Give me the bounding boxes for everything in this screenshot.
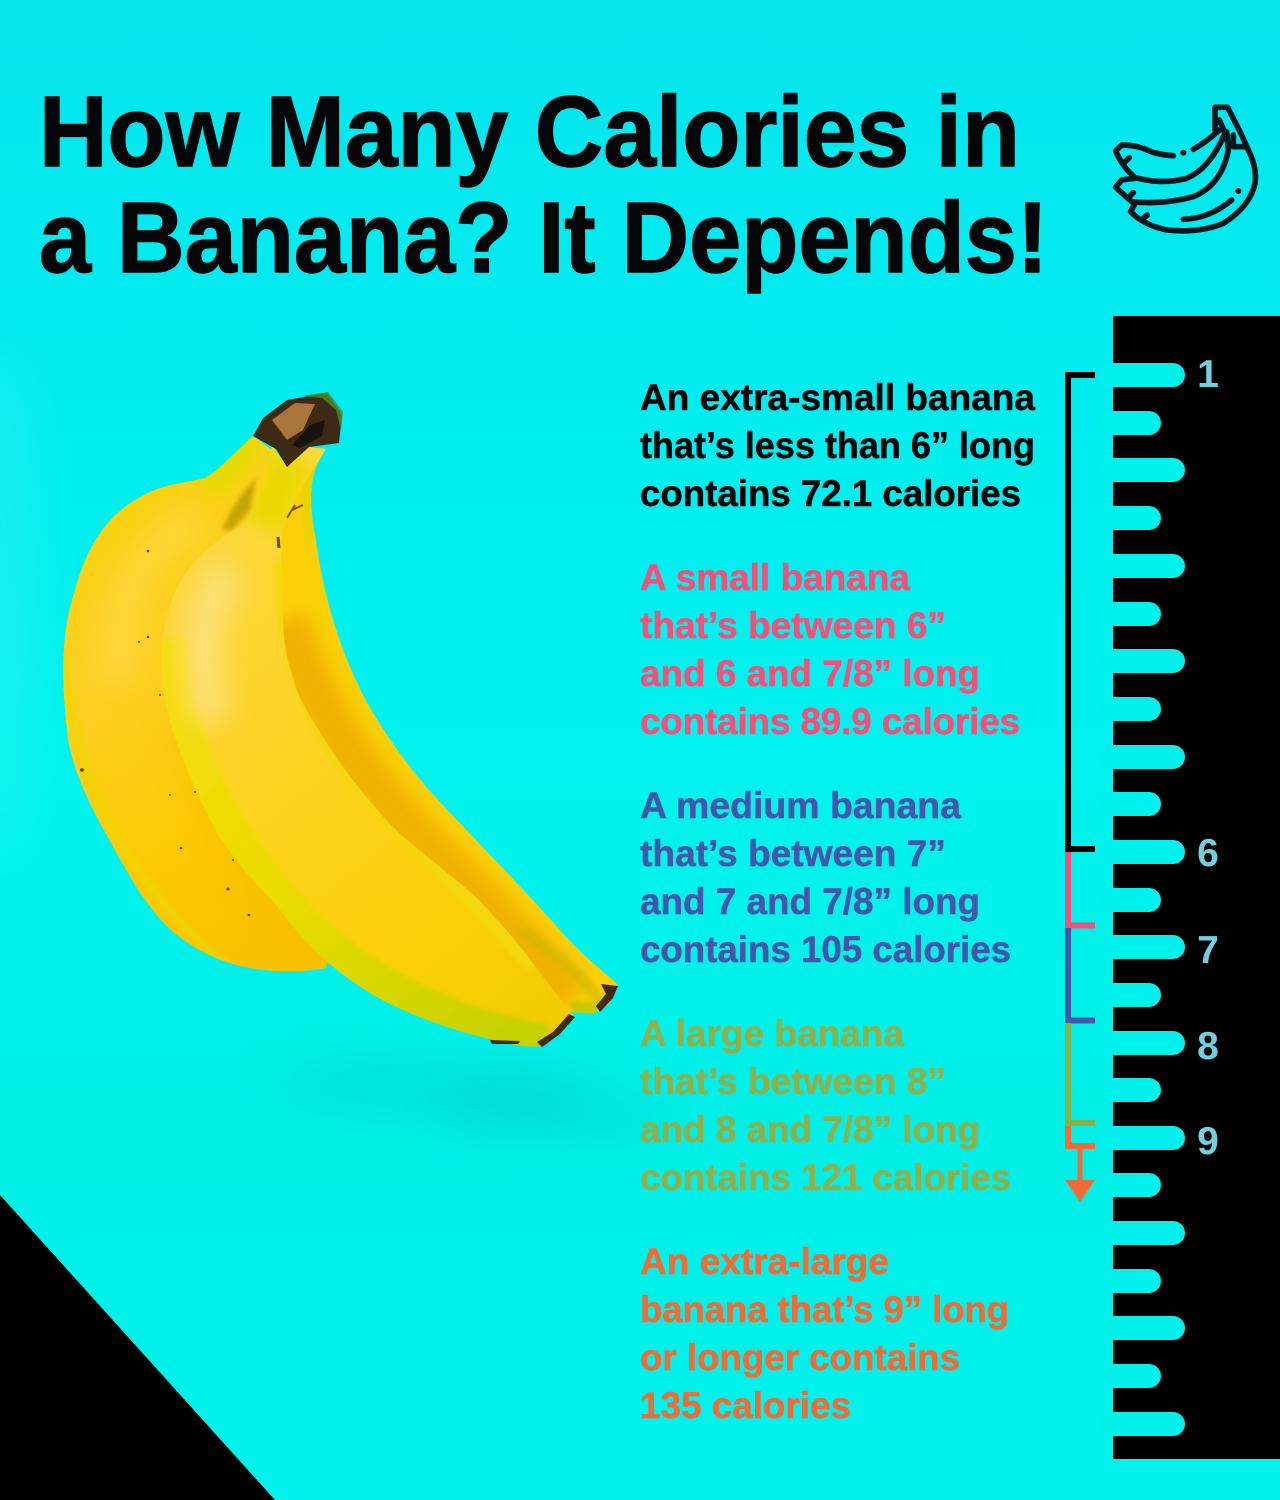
text: extra-large banana: banana that’s 9” long <box>640 1289 1009 1330</box>
text: extra-small banana: contains 72.1 calories <box>640 473 1021 514</box>
text: extra-small banana: that’s less than 6” long <box>640 425 1035 466</box>
text: small banana: contains 89.9 calories <box>640 701 1020 742</box>
text: extra-large banana: or longer contains <box>640 1337 960 1378</box>
bracket: extra-large arrow <box>1065 1126 1095 1202</box>
front banana <box>161 445 575 1047</box>
text: small banana: A small banana <box>640 557 910 598</box>
text: medium banana: and 7 and 7/8” long <box>640 881 980 922</box>
text: extra-large banana: An extra-large <box>640 1241 889 1282</box>
ruler numbers: 8 <box>1197 1025 1219 1068</box>
text: medium banana <box>640 785 1011 970</box>
ruler <box>1100 316 1280 1459</box>
banana stem cap <box>253 392 343 467</box>
ruler numbers <box>1197 353 1219 1163</box>
text: extra-small banana: An extra-small banana <box>640 377 1035 418</box>
ruler numbers: 1 <box>1197 353 1219 396</box>
bracket: medium <box>1068 928 1095 1020</box>
text: small banana: and 6 and 7/8” long <box>640 653 980 694</box>
text: extra-large banana: 135 calories <box>640 1385 851 1426</box>
text: large banana: that’s between 8” <box>640 1061 946 1102</box>
text: medium banana: A medium banana <box>640 785 961 826</box>
text: large banana: A large banana <box>640 1013 904 1054</box>
left banana <box>63 436 350 971</box>
text: medium banana: that’s between 7” <box>640 833 946 874</box>
bracket: small <box>1068 852 1095 926</box>
title: a Banana? It Depends! <box>39 182 1048 294</box>
title: How Many Calories in <box>39 76 1020 188</box>
text: extra-small banana <box>640 377 1035 514</box>
back banana <box>280 449 618 1013</box>
icon: banana bunch <box>1116 107 1255 231</box>
ruler body <box>1113 316 1280 1459</box>
banana specks <box>80 550 250 916</box>
text: small banana: that’s between 6” <box>640 605 946 646</box>
text: medium banana: contains 105 calories <box>640 929 1011 970</box>
text: extra-large banana <box>640 1241 1009 1426</box>
text: large banana: contains 121 calories <box>640 1157 1011 1198</box>
banana shadow <box>270 1057 690 1129</box>
ruler numbers: 7 <box>1197 929 1219 972</box>
text: small banana <box>640 557 1020 742</box>
ruler numbers: 9 <box>1197 1120 1219 1163</box>
title <box>39 76 1048 294</box>
corner triangle <box>0 1195 275 1500</box>
banana tips <box>490 984 618 1047</box>
ruler ticks <box>1100 363 1185 1436</box>
ruler numbers: 6 <box>1197 832 1219 875</box>
bracket: extra-small <box>1068 375 1095 849</box>
text: large banana <box>640 1013 1011 1198</box>
bracket: large <box>1068 1023 1095 1123</box>
text: large banana: and 8 and 7/8” long <box>640 1109 980 1150</box>
illustration: bananas <box>63 392 618 1047</box>
